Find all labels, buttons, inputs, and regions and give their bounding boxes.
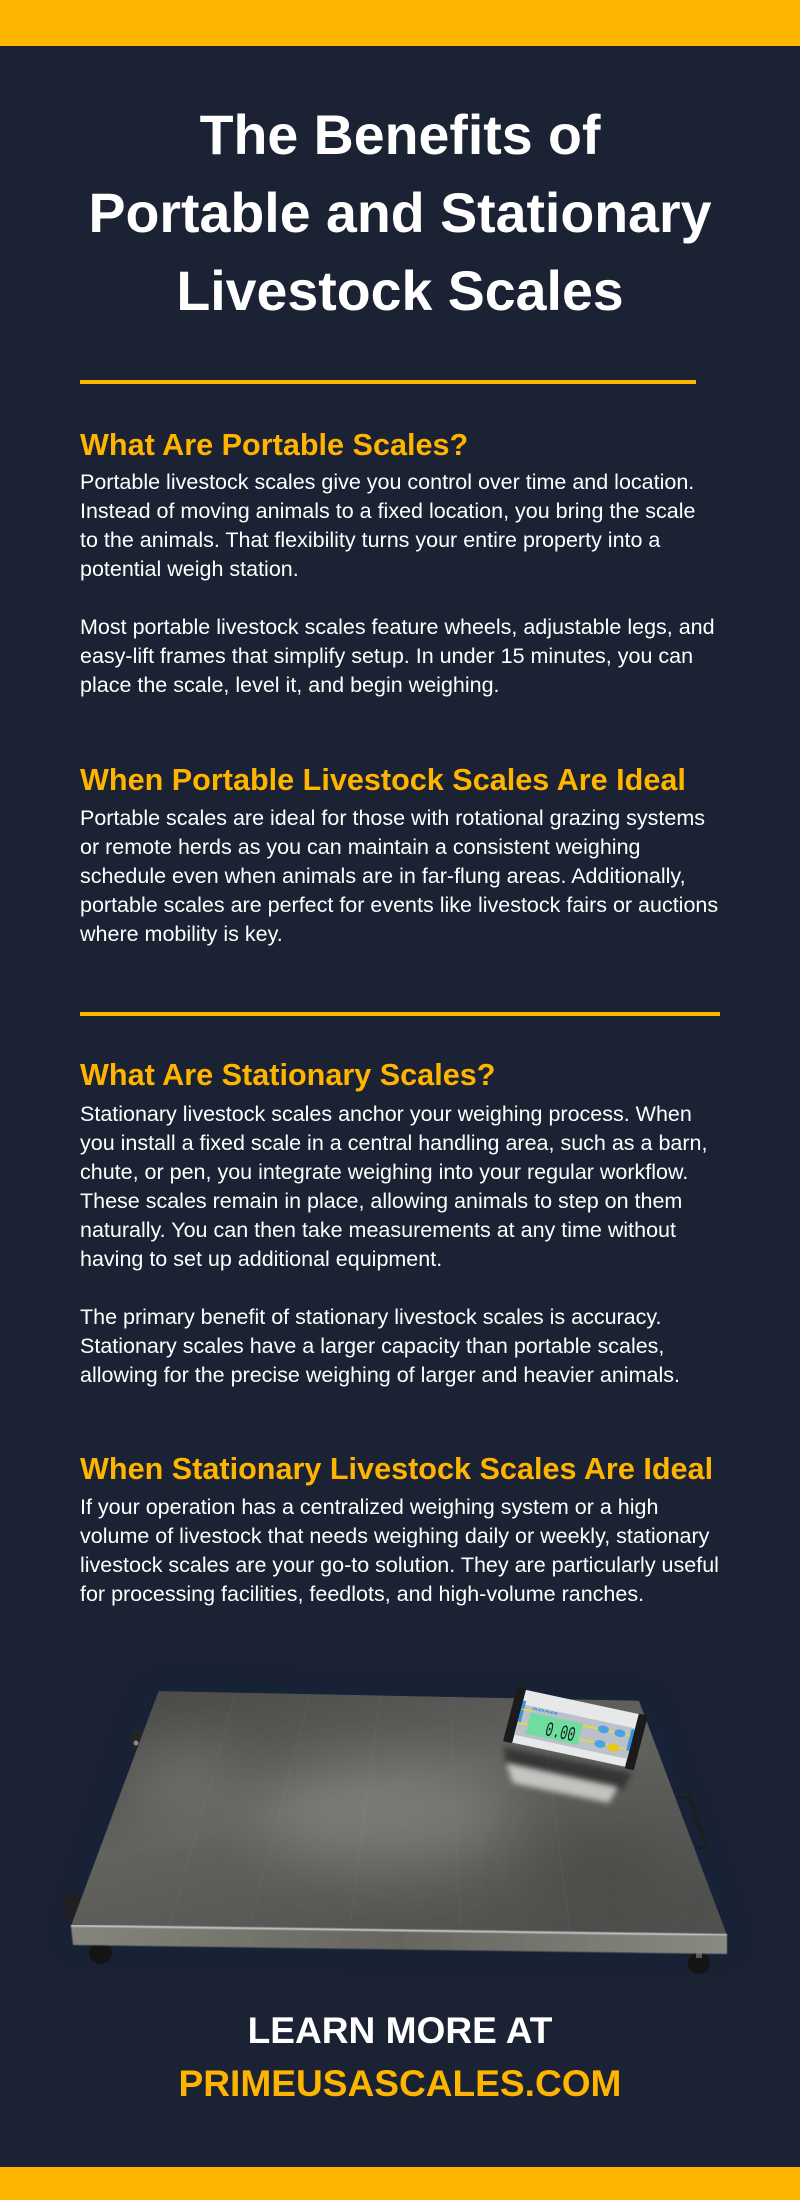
bottom accent bar	[0, 2167, 800, 2200]
digital display unit	[503, 1686, 648, 1770]
text: stationary scales description: chute, or pen, you integrate weighing into your regular workflow.	[80, 1160, 688, 1184]
heading: what are portable scales: What Are Portable Scales?	[80, 428, 468, 462]
shadow under display	[504, 1747, 632, 1790]
text: stationary scales description: allowing for the precise weighing of larger and heavier animals.	[80, 1363, 680, 1387]
heading: what are stationary scales: What Are Stationary Scales?	[80, 1058, 495, 1092]
end caps	[503, 1686, 526, 1743]
text: portable scales ideal uses: or remote herds as you can maintain a consistent weighing	[80, 835, 641, 859]
text: portable scales description: potential weigh station.	[80, 557, 299, 581]
divider: middle	[80, 1012, 720, 1016]
call to action	[179, 2009, 621, 2104]
plate top surface	[71, 1691, 727, 1935]
text: portable scales description: Most portable livestock scales feature wheels, adjustable legs, and	[80, 615, 715, 639]
call to action: LEARN MORE AT	[248, 2009, 552, 2051]
text: portable scales description: Portable livestock scales give you control over time and location.	[80, 470, 694, 494]
text: portable scales ideal uses: where mobility is key.	[80, 922, 283, 946]
text: portable scales ideal uses	[80, 806, 718, 946]
scale feet	[89, 1942, 710, 1974]
heading: when portable scales are ideal: When Portable Livestock Scales Are Ideal	[80, 763, 686, 797]
plate bright front lip	[71, 1926, 727, 1935]
text: stationary scales description: Stationary livestock scales anchor your weighing process. When	[80, 1102, 692, 1126]
text: stationary scales ideal uses	[80, 1495, 719, 1606]
text: stationary scales ideal uses: volume of livestock that needs weighing daily or weekly, stationary	[80, 1524, 709, 1548]
display body	[508, 1689, 643, 1768]
text: portable scales description	[80, 470, 715, 697]
text: stationary scales description: naturally. You can then take measurements at any time without	[80, 1218, 676, 1242]
text: stationary scales description: These scales remain in place, allowing animals to step on them	[80, 1189, 682, 1213]
text: stationary scales description: Stationary scales have a larger capacity than portable scales,	[80, 1334, 664, 1358]
title: The Benefits of	[200, 104, 600, 166]
LCD screen	[525, 1713, 583, 1745]
text: portable scales ideal uses: schedule even when animals are in far-flung areas. Additionally,	[80, 864, 686, 888]
text: stationary scales description: having to set up additional equipment.	[80, 1247, 442, 1271]
side knobs and handle	[65, 1730, 706, 1920]
top accent bar	[0, 0, 800, 46]
title	[89, 104, 712, 322]
text: stationary scales ideal uses: livestock scales are your go-to solution. They are particularly useful	[80, 1553, 719, 1577]
title: Portable and Stationary	[89, 182, 711, 244]
text: portable scales description: to the animals. That flexibility turns your entire property into a	[80, 528, 660, 552]
text: portable scales description: easy-lift frames that simplify setup. In under 15 minutes, you can	[80, 644, 693, 668]
text: portable scales ideal uses: Portable scales are ideal for those with rotational grazing systems	[80, 806, 705, 830]
reflection under display	[506, 1763, 618, 1803]
call to action: PRIMEUSASCALES.COM	[179, 2062, 621, 2104]
title: Livestock Scales	[176, 260, 624, 322]
buttons	[597, 1724, 610, 1734]
illustration: platform scale	[65, 1686, 728, 1974]
text: stationary scales description	[80, 1102, 707, 1387]
text: portable scales description: place the scale, level it, and begin weighing.	[80, 673, 500, 697]
text: portable scales description: Instead of moving animals to a fixed location, you bring the scale	[80, 499, 696, 523]
text: stationary scales description: The primary benefit of stationary livestock scales is accuracy.	[80, 1305, 662, 1329]
text: stationary scales description: you install a fixed scale in a central handling area, such as a barn,	[80, 1131, 707, 1155]
divider: top	[80, 380, 696, 384]
yellow stripes	[522, 1709, 533, 1711]
text: stationary scales ideal uses: If your operation has a centralized weighing system or a high	[80, 1495, 658, 1519]
text: stationary scales ideal uses: for processing facilities, feedlots, and high-volume ranches.	[80, 1582, 644, 1606]
text: portable scales ideal uses: portable scales are perfect for events like livestock fairs or auctions	[80, 893, 718, 917]
plate front edge	[71, 1926, 727, 1954]
heading: when stationary scales are ideal: When Stationary Livestock Scales Are Ideal	[80, 1452, 713, 1486]
digital display unit: 0.00	[543, 1719, 578, 1747]
brand text: ADAM	[531, 1707, 558, 1716]
blue halo behind the scale	[65, 1690, 735, 1950]
brushed highlights	[255, 1765, 515, 1865]
grey control panel	[515, 1704, 634, 1759]
